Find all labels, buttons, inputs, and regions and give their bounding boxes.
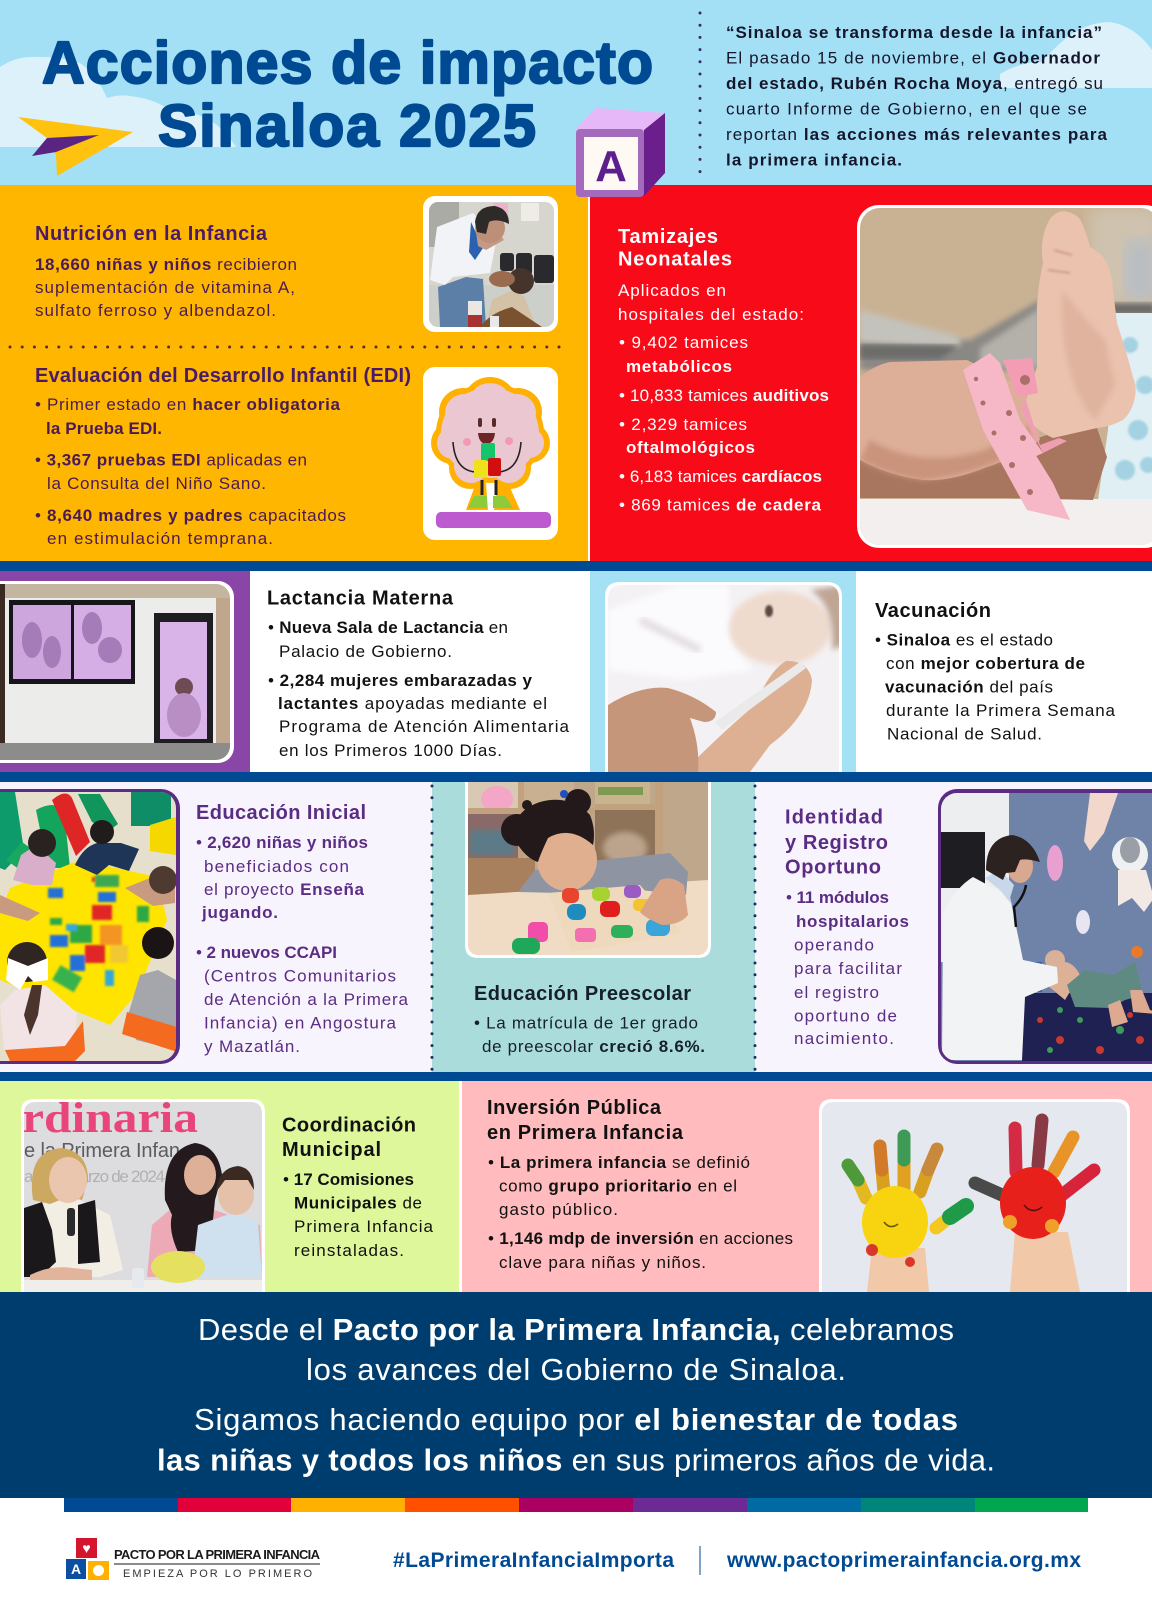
text: vacunación: [875, 630, 1116, 744]
heading: tamizajes: [618, 226, 732, 270]
intro text: la primera infancia.: [726, 150, 902, 170]
text: lactancia: • Nueva Sala de Lactancia en: [268, 618, 508, 637]
text: tamizajes: Aplicados en: [618, 281, 726, 300]
text: nutrición: 18,660 niñas y niños recibieron: [35, 255, 297, 274]
text: tamizajes: • 2,329 tamices: [619, 415, 747, 434]
text: tamizajes: metabólicos: [626, 357, 732, 376]
closing message banner: [0, 1292, 1152, 1498]
divider: [700, 1546, 701, 1575]
text: nutrición: suplementación de vitamina A,: [35, 278, 295, 297]
text: educación inicial: y Mazatlán.: [204, 1037, 300, 1056]
text: identidad: hospitalarios: [796, 912, 909, 931]
text: inversión: [488, 1153, 793, 1272]
heading: EDI: Evaluación del Desarrollo Infantil (EDI): [35, 365, 411, 387]
heading: vacunación: Vacunación: [875, 600, 991, 622]
text: EDI: • 3,367 pruebas EDI aplicadas en: [35, 450, 307, 470]
navy band: [0, 1072, 1152, 1082]
text: tamizajes: hospitales del estado:: [618, 305, 804, 324]
text: identidad: oportuno de: [794, 1006, 897, 1026]
panel: coordinación municipal: [0, 1081, 462, 1293]
text: educación inicial: jugando.: [201, 903, 278, 922]
dotted divider: [698, 13, 702, 172]
heading: lactancia: Lactancia Materna: [267, 588, 454, 610]
photo: doctor y niño: [423, 196, 558, 332]
heading: identidad: Identidad: [785, 806, 883, 828]
text: vacunación: Nacional de Salud.: [887, 724, 1042, 744]
text: educación inicial: de Atención a la Primera: [204, 990, 409, 1009]
text: lactancia: Palacio de Gobierno.: [279, 642, 452, 661]
intro text: [726, 23, 1108, 170]
title: [42, 30, 653, 159]
title: Acciones de impacto: [42, 30, 653, 96]
heading: tamizajes: Neonatales: [618, 248, 732, 270]
text: educación inicial: (Centros Comunitarios: [204, 966, 396, 986]
panel: identidad: [755, 782, 1152, 1073]
text: coordinación: Municipales de: [294, 1194, 422, 1212]
icon: brain character: [423, 367, 558, 540]
website: www.pactoprimerainfancia.org.mx: [726, 1549, 1081, 1572]
heading: coordinación: Municipal: [282, 1139, 381, 1161]
text: EDI: en estimulación temprana.: [47, 529, 273, 548]
text: preescolar: • La matrícula de 1er grado: [474, 1014, 698, 1032]
closing text: Desde el Pacto por la Primera Infancia, celebramos: [198, 1312, 954, 1347]
heading: coordinación: Coordinación: [282, 1114, 416, 1136]
heading: inversión: Inversión Pública: [487, 1097, 662, 1119]
navy band: [0, 561, 1152, 571]
heading: identidad: [785, 806, 888, 878]
intro text: cuarto Informe de Gobierno, en el que se: [726, 100, 1087, 118]
heading: nutrición: Nutrición en la Infancia: [35, 223, 268, 245]
panel: nutrición y EDI: [0, 185, 588, 561]
panel: tamizajes neonatales: [590, 185, 1152, 561]
dotted divider: [10, 346, 560, 348]
text: vacunación: durante la Primera Semana: [886, 701, 1116, 720]
text: tamizajes: • 6,183 tamices cardíacos: [619, 467, 822, 486]
text: educación inicial: • 2 nuevos CCAPI: [196, 943, 337, 962]
photo: sala de lactancia: [0, 581, 234, 763]
text: inversión: • La primera infancia se definió: [488, 1153, 750, 1172]
logo: Pacto por la Primera Infancia: [66, 1538, 321, 1580]
photo: vaccine: [605, 582, 844, 772]
panel: educación preescolar: [432, 782, 755, 1073]
photo: painted hands: [819, 1099, 1130, 1292]
photo: press conference: a 1 de marzo de 2024: [24, 1167, 165, 1186]
icon: paper plane: [18, 117, 133, 176]
text: coordinación: Primera Infancia: [294, 1217, 434, 1236]
text: preescolar: de preescolar creció 8.6%.: [482, 1037, 705, 1056]
intro text: “Sinaloa se transforma desde la infancia”: [726, 23, 1102, 42]
text: vacunación: vacunación del país: [885, 678, 1053, 696]
text: EDI: [35, 395, 346, 548]
text: coordinación: reinstaladas.: [294, 1241, 404, 1260]
dotted dividers: [432, 786, 755, 1072]
text: vacunación: • Sinaloa es el estado: [875, 630, 1053, 650]
closing text: las niñas y todos los niños en sus primeros años de vida.: [157, 1442, 995, 1478]
text: lactancia: lactantes apoyadas mediante el: [278, 694, 547, 713]
text: identidad: operando: [794, 936, 874, 954]
heading: tamizajes: Tamizajes: [618, 226, 718, 248]
text: lactancia: Programa de Atención Alimentaria: [279, 717, 570, 736]
text: nutrición: sulfato ferroso y albendazol.: [35, 301, 276, 320]
text: educación inicial: el proyecto Enseña: [204, 880, 365, 899]
navy band: [0, 772, 1152, 782]
text: tamizajes: • 869 tamices de cadera: [619, 496, 822, 514]
text: inversión: como grupo prioritario en el: [499, 1176, 737, 1196]
text: inversión: gasto público.: [499, 1200, 618, 1219]
text: educación inicial: [196, 833, 409, 1056]
intro text: reportan las acciones más relevantes para: [726, 125, 1108, 144]
decorative block letter A: [576, 108, 665, 197]
text: EDI: • 8,640 madres y padres capacitados: [35, 506, 346, 525]
closing text: [157, 1312, 995, 1478]
photo: baby foot with hospital band: [855, 205, 1152, 549]
panel: educación inicial: [0, 782, 432, 1073]
decorative clouds: [0, 22, 1152, 147]
photo: girl with puzzle: [465, 782, 711, 958]
text: educación inicial: beneficiados con: [204, 857, 349, 876]
text: educación inicial: • 2,620 niñas y niños: [196, 833, 368, 852]
closing text: los avances del Gobierno de Sinaloa.: [306, 1352, 846, 1387]
text: educación inicial: Infancia) en Angostura: [204, 1014, 397, 1032]
text: identidad: nacimiento.: [794, 1029, 894, 1048]
logo: Pacto por la Primera Infancia: ♥: [82, 1540, 91, 1556]
heading: educación inicial: Educación Inicial: [196, 802, 366, 824]
text: tamizajes: • 10,833 tamices auditivos: [619, 386, 829, 405]
decorative block letter A: A: [595, 142, 627, 191]
heading: coordinación: [282, 1114, 416, 1161]
logo: Pacto por la Primera Infancia: EMPIEZA POR LO PRIMERO: [123, 1568, 312, 1580]
text: identidad: [786, 888, 909, 1048]
title: Sinaloa 2025: [158, 93, 536, 159]
text: identidad: • 11 módulos: [786, 888, 889, 907]
text: lactancia: en los Primeros 1000 Días.: [279, 741, 502, 760]
panel: vacunación: [590, 571, 1152, 772]
text: EDI: la Prueba EDI.: [46, 419, 162, 438]
hashtag: #LaPrimeraInfanciaImporta: [393, 1549, 674, 1572]
panel: inversión pública: [462, 1081, 1152, 1293]
text: preescolar: [474, 1014, 705, 1056]
text: nutrición: [35, 255, 297, 320]
intro text: del estado, Rubén Rocha Moya, entregó su: [726, 74, 1103, 93]
heading: preescolar: Educación Preescolar: [474, 983, 691, 1005]
logo: Pacto por la Primera Infancia: PACTO POR LA PRIMERA INFANCIA: [114, 1547, 321, 1562]
text: identidad: el registro: [794, 983, 879, 1002]
text: tamizajes: oftalmológicos: [626, 438, 755, 457]
text: tamizajes: [618, 281, 829, 514]
photo: doctor with toddler: [938, 789, 1152, 1064]
photo: press conference: rdinaria: [22, 1095, 198, 1142]
panel: lactancia materna: [0, 571, 590, 772]
closing text: Sigamos haciendo equipo por el bienestar de todas: [194, 1402, 958, 1437]
text: EDI: • Primer estado en hacer obligatoria: [35, 395, 341, 414]
text: vacunación: con mejor cobertura de: [886, 654, 1085, 673]
text: identidad: para facilitar: [794, 959, 902, 978]
header panel: [0, 0, 1152, 186]
text: EDI: la Consulta del Niño Sano.: [47, 474, 266, 493]
photo: children with blocks: [0, 789, 180, 1064]
heading: inversión: en Primera Infancia: [487, 1122, 684, 1144]
heading: inversión: [487, 1097, 684, 1144]
text: inversión: • 1,146 mdp de inversión en acciones: [488, 1229, 793, 1248]
text: inversión: clave para niñas y niños.: [499, 1253, 706, 1272]
intro text: El pasado 15 de noviembre, el Gobernador: [726, 48, 1100, 68]
logo: Pacto por la Primera Infancia: A: [71, 1561, 81, 1577]
heading: identidad: y Registro: [785, 832, 888, 854]
text: coordinación: [283, 1170, 434, 1260]
text: tamizajes: • 9,402 tamices: [619, 333, 748, 352]
text: lactancia: • 2,284 mujeres embarazadas y: [268, 671, 533, 690]
text: coordinación: • 17 Comisiones: [283, 1170, 414, 1189]
photo: press conference: e la Primera Infan: [24, 1140, 180, 1162]
text: lactancia: [268, 618, 570, 760]
photo: press conference: [21, 1095, 265, 1292]
heading: identidad: Oportuno: [785, 856, 881, 878]
color strip: [64, 1498, 1088, 1512]
